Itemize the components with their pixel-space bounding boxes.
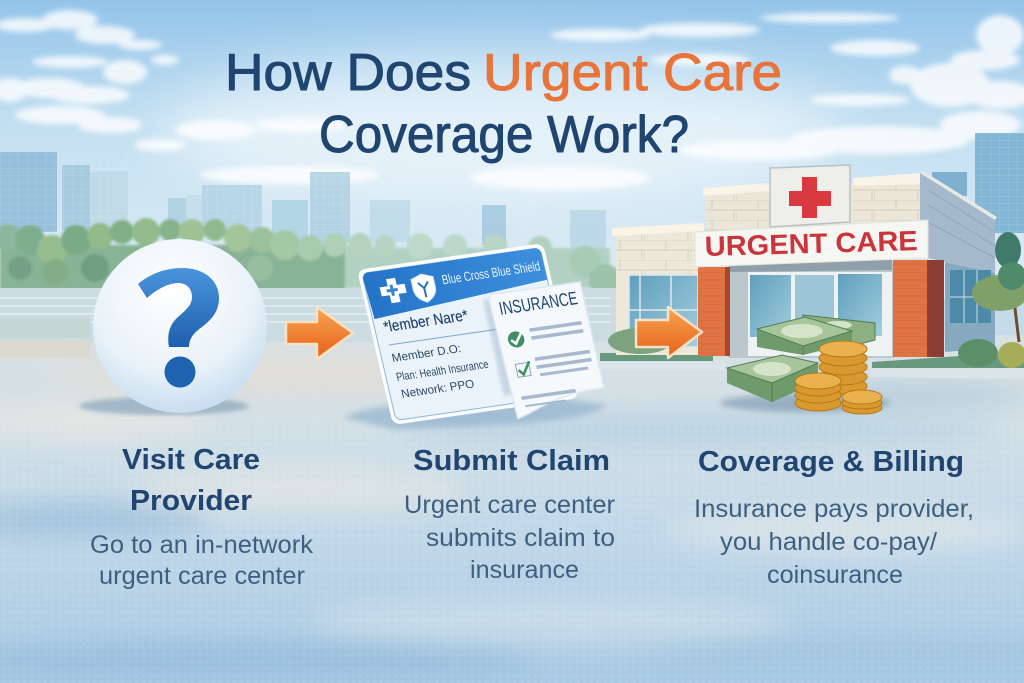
coin stack tall xyxy=(819,341,867,394)
icon: insurance card xyxy=(345,243,608,430)
icon: question mark circle xyxy=(79,239,267,415)
heading: Submit Claim xyxy=(413,445,610,477)
sign band xyxy=(695,220,928,267)
curb xyxy=(600,360,1024,379)
background: ground texture xyxy=(0,357,1024,678)
card body xyxy=(357,243,579,425)
lawn xyxy=(600,353,1024,368)
background: tree line xyxy=(0,218,621,296)
upper wall xyxy=(705,180,921,236)
title: Urgent Care xyxy=(483,44,782,102)
sign text: URGENT CARE xyxy=(704,225,918,262)
description xyxy=(90,531,314,590)
title xyxy=(225,44,782,164)
left pillar xyxy=(698,267,728,356)
right pillar xyxy=(893,260,928,357)
card body: Network: PPO xyxy=(400,377,476,401)
background: right towers xyxy=(932,133,1024,233)
description xyxy=(404,491,615,584)
background: city skyline xyxy=(0,152,606,250)
tree xyxy=(972,232,1024,342)
insurance document xyxy=(482,282,608,420)
heading: Visit Care xyxy=(122,444,260,476)
background: clouds xyxy=(0,10,1024,190)
left shrub xyxy=(608,328,672,354)
shrubs xyxy=(958,339,998,367)
side wall xyxy=(920,173,995,273)
description: insurance xyxy=(470,556,579,584)
background: ground xyxy=(0,335,1024,683)
heading: Provider xyxy=(130,485,252,517)
description: you handle co-pay/ xyxy=(720,528,937,556)
background: far shore stripes xyxy=(0,288,620,358)
description: Urgent care center xyxy=(404,491,615,519)
title: Coverage Work? xyxy=(319,106,689,164)
banknote stacks xyxy=(727,355,818,402)
insurance document: INSURANCE xyxy=(497,287,579,319)
heading xyxy=(122,444,260,517)
card body: Blue Cross Blue Shield xyxy=(440,258,542,287)
arrow: step 1 to 2 xyxy=(286,307,353,359)
step 2: Submit Claim xyxy=(404,445,615,584)
heading: Coverage & Billing xyxy=(698,446,964,478)
coin stack small xyxy=(842,390,882,414)
sign box xyxy=(770,165,850,227)
card body: *lember Nare* xyxy=(382,307,470,336)
title: How Does xyxy=(225,44,471,102)
description: Go to an in-network xyxy=(90,531,314,559)
description xyxy=(694,495,974,589)
description: Insurance pays provider, xyxy=(694,495,974,523)
description: coinsurance xyxy=(767,561,903,589)
background: soft central haze xyxy=(160,55,840,205)
coin stack left xyxy=(795,373,841,411)
step 3: Coverage & Billing xyxy=(694,446,974,589)
icon: red cross xyxy=(789,177,831,218)
background: dot texture xyxy=(0,420,1024,683)
description: urgent care center xyxy=(99,562,305,590)
icon: urgent care clinic xyxy=(600,165,1024,379)
step 1: Visit Care Provider xyxy=(90,444,314,590)
icon: money and coins xyxy=(720,315,890,414)
center wall and doors xyxy=(728,262,894,358)
left wing xyxy=(616,230,701,355)
card body: Member D.O: xyxy=(391,342,462,365)
description: submits claim to xyxy=(426,524,615,552)
background: sky xyxy=(0,0,1024,300)
arrow: step 2 to 3 xyxy=(636,307,702,358)
card body: Plan: Health Insurance xyxy=(395,358,490,384)
